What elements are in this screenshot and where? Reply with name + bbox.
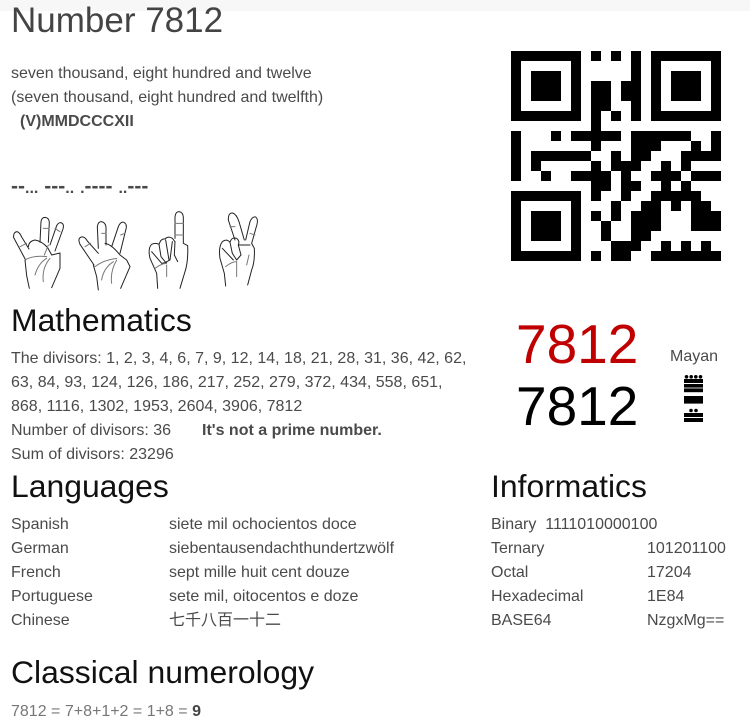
informatics table: Ternary <box>491 540 544 557</box>
languages table: Spanish <box>11 516 69 533</box>
numerology sum: 7812 = 7+8+1+2 = 1+8 = 9 <box>11 703 201 720</box>
top bar <box>0 0 750 11</box>
heading: Mathematics: Mathematics <box>11 302 192 338</box>
languages table: siebentausendachthundertzwölf <box>169 540 394 557</box>
informatics table: BASE64 <box>491 612 551 629</box>
informatics table: 101201100 <box>647 540 726 557</box>
title: Number 7812 <box>11 1 223 40</box>
divisors block: Number of divisors: 36 <box>11 422 171 439</box>
heading: Languages: Languages <box>11 468 169 504</box>
number names: seven thousand, eight hundred and twelve <box>11 65 312 82</box>
divisors block: 868, 1116, 1302, 1953, 2604, 3906, 7812 <box>11 398 302 415</box>
QR code <box>511 51 721 261</box>
morse code: --... ---.. .---- ..--- <box>11 175 148 198</box>
hand 8 <box>79 222 130 290</box>
divisors block: 63, 84, 93, 124, 126, 186, 217, 252, 279, 372, 434, 558, 651, <box>11 374 442 391</box>
icon: sign language hands <box>13 211 258 290</box>
informatics table: NzgxMg== <box>647 612 724 629</box>
languages table: 七千八百一十二 <box>169 612 281 629</box>
number names: (seven thousand, eight hundred and twelfth) <box>11 89 323 106</box>
divisors block: It's not a prime number. <box>202 422 382 439</box>
languages table: German <box>11 540 69 557</box>
languages table: French <box>11 564 61 581</box>
hand 7 <box>14 217 63 288</box>
number names <box>11 65 323 130</box>
informatics table <box>491 516 726 629</box>
heading: Classical numerology: Classical numerology <box>11 654 314 690</box>
Mayan label: Mayan <box>670 348 718 365</box>
heading: Informatics: Informatics <box>491 468 647 504</box>
hand 1 <box>149 212 188 288</box>
informatics table: 1E84 <box>647 588 684 605</box>
languages table: sept mille huit cent douze <box>169 564 350 581</box>
divisors block: The divisors: 1, 2, 3, 4, 6, 7, 9, 12, 14, 18, 21, 28, 31, 36, 42, 62, <box>11 350 466 367</box>
number names: (V)MMDCCCXII <box>20 113 134 130</box>
hand 2 <box>220 213 257 286</box>
informatics table: Binary 1111010000100 <box>491 516 657 533</box>
languages table <box>11 516 394 629</box>
big red number: 7812 <box>516 313 638 375</box>
languages table: siete mil ochocientos doce <box>169 516 357 533</box>
languages table: Portuguese <box>11 588 93 605</box>
informatics table: 17204 <box>647 564 692 581</box>
divisors block <box>11 350 466 463</box>
informatics table: Octal <box>491 564 528 581</box>
icon: Mayan numeral <box>684 375 703 422</box>
big black number: 7812 <box>516 375 638 437</box>
informatics table: Hexadecimal <box>491 588 583 605</box>
languages table: Chinese <box>11 612 70 629</box>
divisors block: Sum of divisors: 23296 <box>11 446 174 463</box>
languages table: sete mil, oitocentos e doze <box>169 588 358 605</box>
